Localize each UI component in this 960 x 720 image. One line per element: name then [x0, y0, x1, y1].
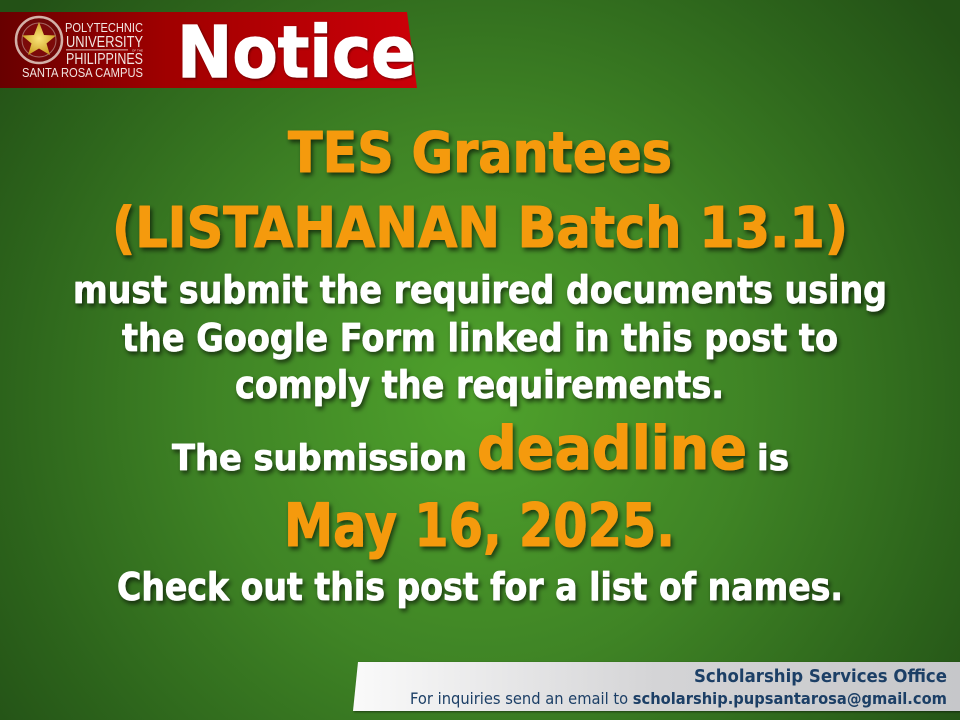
body line 2: the Google Form linked in this post to	[122, 316, 838, 360]
office name: Scholarship Services Office	[694, 667, 947, 687]
university name: PHILIPPINES	[66, 51, 143, 68]
title line 1: TES Grantees	[288, 121, 672, 186]
deadline line: The submission	[172, 438, 467, 479]
university name: UNIVERSITY	[66, 34, 143, 51]
body line 3: comply the requirements.	[235, 363, 724, 407]
main message	[73, 121, 887, 609]
deadline line: is	[757, 438, 789, 479]
university name	[22, 20, 143, 80]
university name: OF THE	[132, 48, 143, 52]
university name: POLYTECHNIC	[65, 20, 143, 35]
inquiry line: For inquiries send an email to scholarship.pupsantarosa@gmail.com	[410, 689, 947, 708]
header banner	[0, 11, 417, 94]
deadline line	[172, 414, 789, 484]
deadline line: deadline	[477, 414, 747, 484]
footer contact bar	[353, 662, 960, 711]
deadline date: May 16, 2025.	[284, 491, 675, 561]
icon: university seal	[16, 17, 62, 63]
closing line: Check out this post for a list of names.	[117, 565, 843, 609]
university name: SANTA ROSA CAMPUS	[22, 65, 143, 80]
banner shape	[0, 12, 417, 88]
Notice heading: Notice	[177, 11, 416, 94]
title line 2: (LISTAHANAN Batch 13.1)	[112, 196, 848, 261]
